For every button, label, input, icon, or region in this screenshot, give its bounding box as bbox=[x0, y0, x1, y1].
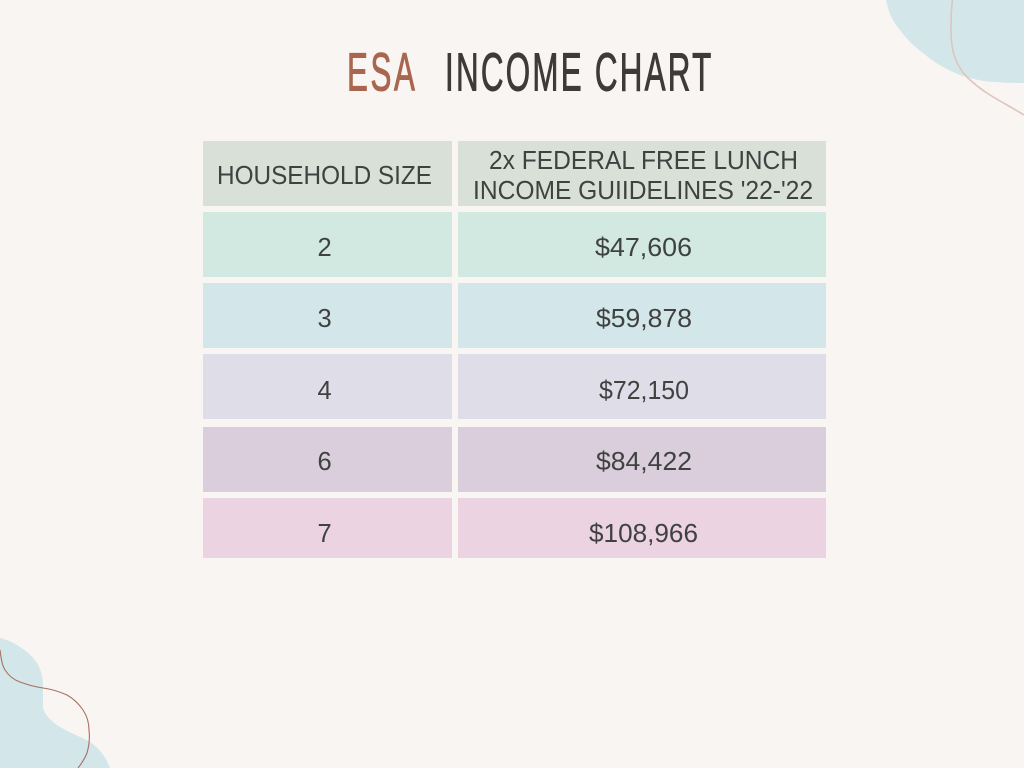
row: household size 7 bbox=[203, 498, 826, 558]
row: household size 7: $108,966 bbox=[589, 520, 698, 548]
title: INCOME CHART bbox=[445, 43, 711, 103]
row: household size 2: 2 bbox=[318, 234, 332, 262]
header row bbox=[203, 141, 826, 206]
row: household size 6: $84,422 bbox=[596, 448, 692, 476]
header row: HOUSEHOLD SIZE bbox=[217, 162, 432, 190]
decoration: top right blob bbox=[886, 0, 1024, 115]
table: income chart bbox=[203, 141, 826, 558]
row: household size 4 bbox=[203, 354, 826, 419]
row: household size 2: $47,606 bbox=[595, 234, 692, 262]
row: household size 7: 7 bbox=[318, 520, 332, 548]
decoration: bottom left blob bbox=[0, 638, 110, 768]
title: ESA bbox=[347, 43, 415, 103]
header row: INCOME GUIIDELINES '22-'22 bbox=[473, 177, 813, 205]
row: household size 4: $72,150 bbox=[599, 377, 689, 405]
header row: 2x FEDERAL FREE LUNCH bbox=[489, 147, 798, 175]
row: household size 3: 3 bbox=[318, 305, 332, 333]
row: household size 4: 4 bbox=[318, 377, 332, 405]
row: household size 6 bbox=[203, 427, 826, 492]
row: household size 2 bbox=[203, 212, 826, 277]
row: household size 6: 6 bbox=[318, 448, 332, 476]
row: household size 3: $59,878 bbox=[596, 305, 692, 333]
row: household size 3 bbox=[203, 283, 826, 348]
